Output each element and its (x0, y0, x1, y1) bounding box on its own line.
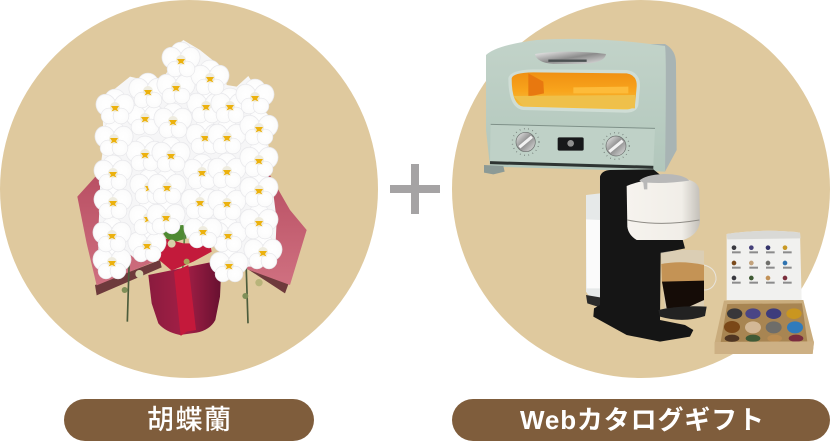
icon: orchid arrangement (77, 40, 307, 336)
icon: plus sign (390, 164, 440, 214)
icon: coffee machine (586, 169, 716, 342)
white flower mass (98, 40, 277, 273)
panel: left circle background (0, 0, 378, 378)
body (593, 169, 693, 342)
label: orchid pill (64, 399, 314, 441)
ribbon (174, 265, 196, 336)
wrapping paper (77, 169, 307, 336)
cup (661, 250, 704, 310)
pot (148, 260, 222, 335)
icon: toaster oven (484, 39, 677, 174)
label: catalog gift pill (452, 399, 830, 441)
label: orchid pill: 胡蝶蘭 (147, 405, 231, 435)
white head (627, 179, 700, 240)
panel: right circle background (452, 0, 830, 378)
label: catalog gift pill: Webカタログギフト (520, 405, 764, 435)
water tank (586, 193, 600, 300)
leaves and stems (157, 220, 187, 243)
icon: capsule box (715, 231, 814, 354)
